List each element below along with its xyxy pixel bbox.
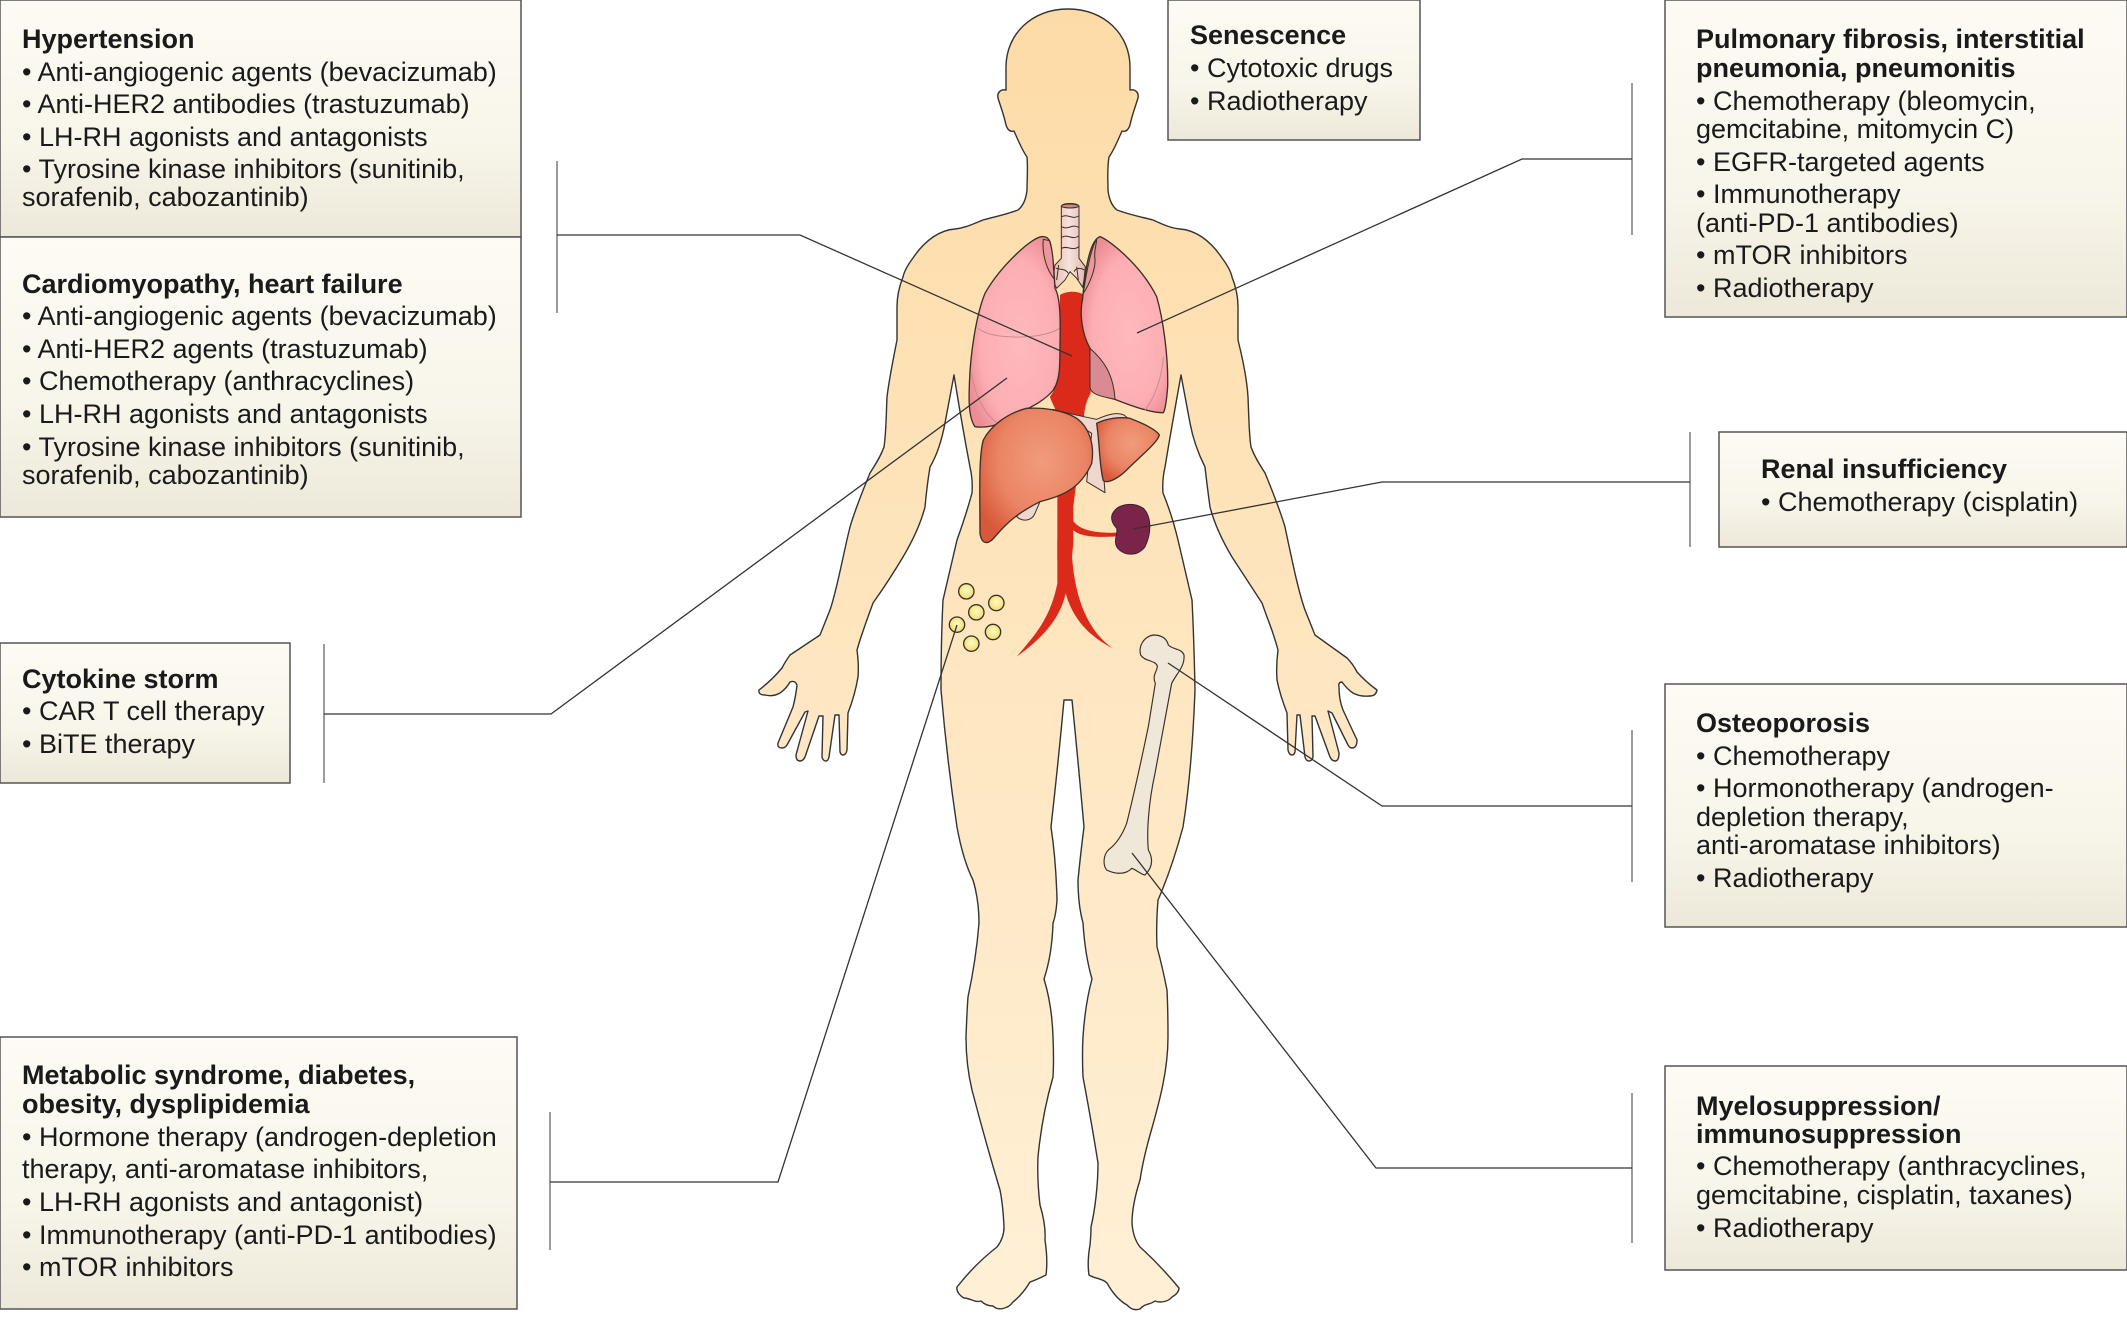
- panel: metabolic syndrome: [0, 1037, 517, 1309]
- trachea and bronchi: [1053, 203, 1085, 288]
- list: cardiomyopathy agents: • Tyrosine kinase inhibitors (sunitinib,: [22, 432, 465, 462]
- list: pulmonary agents: • Chemotherapy (bleomycin,: [1696, 86, 2036, 116]
- list: osteoporosis agents: [1696, 741, 2054, 893]
- panel: pulmonary fibrosis: [1665, 0, 2127, 317]
- femur bone: [1104, 635, 1184, 875]
- list: hypertension agents: [22, 57, 497, 212]
- list: cytokine agents: • BiTE therapy: [22, 729, 196, 759]
- kidney: [1112, 504, 1150, 554]
- list: pulmonary agents: • mTOR inhibitors: [1696, 240, 1908, 270]
- list: myelosuppression agents: [1696, 1151, 2087, 1243]
- list: myelosuppression agents: • Radiotherapy: [1696, 1213, 1874, 1243]
- list: pulmonary agents: • Immunotherapy: [1696, 179, 1901, 209]
- heading: metabolic syndrome: Metabolic syndrome, diabetes,: [22, 1060, 415, 1090]
- list: cardiomyopathy agents: • LH-RH agonists and antagonists: [22, 399, 428, 429]
- list: pulmonary agents: • EGFR-targeted agents: [1696, 147, 1985, 177]
- list: hypertension agents: • Anti-HER2 antibodies (trastuzumab): [22, 89, 470, 119]
- panel: myelosuppression: immunosuppression: [1696, 1119, 1962, 1149]
- human body silhouette: [759, 9, 1377, 1310]
- connector: metabolic syndrome to fat cells: [550, 625, 957, 1250]
- list: osteoporosis agents: • Chemotherapy: [1696, 741, 1891, 771]
- adipose cells: [949, 584, 1004, 651]
- connector: cytokine storm to lung: [324, 378, 1007, 783]
- heading: cytokine storm: Cytokine storm: [22, 664, 219, 694]
- heading: pulmonary fibrosis: Pulmonary fibrosis, interstitial: [1696, 24, 2085, 54]
- list: metabolic agents: • mTOR inhibitors: [22, 1252, 234, 1282]
- list: pulmonary agents: gemcitabine, mitomycin C): [1696, 114, 2014, 144]
- list: hypertension agents: • Tyrosine kinase inhibitors (sunitinib,: [22, 154, 465, 184]
- list: metabolic agents: [22, 1122, 497, 1282]
- aorta and renal artery: [1017, 292, 1117, 657]
- list: osteoporosis agents: • Hormonotherapy (androgen-: [1696, 773, 2054, 803]
- panel: senescence: [1168, 0, 1420, 140]
- list: cytokine agents: • CAR T cell therapy: [22, 696, 265, 726]
- heading: cardiomyopathy: Cardiomyopathy, heart failure: [22, 269, 403, 299]
- list: cardiomyopathy agents: • Anti-HER2 agents (trastuzumab): [22, 334, 428, 364]
- list: senescence agents: [1190, 53, 1393, 116]
- list: hypertension agents: • LH-RH agonists and antagonists: [22, 122, 428, 152]
- heading: myelosuppression: Myelosuppression/: [1696, 1091, 1941, 1121]
- list: pulmonary agents: • Radiotherapy: [1696, 273, 1874, 303]
- connector: cardiovascular boxes to aorta: [557, 161, 1072, 356]
- panel: cytokine storm: [0, 643, 290, 783]
- connector: myelosuppression to bone marrow: [1132, 853, 1632, 1243]
- heading: hypertension: Hypertension: [22, 24, 195, 54]
- list: metabolic agents: • LH-RH agonists and antagonist): [22, 1187, 423, 1217]
- heading: senescence: Senescence: [1190, 20, 1346, 50]
- connector: pulmonary to lung: [1137, 83, 1632, 333]
- list: hypertension agents: • Anti-angiogenic agents (bevacizumab): [22, 57, 497, 87]
- panel: myelosuppression: [1665, 1066, 2127, 1270]
- list: senescence agents: • Cytotoxic drugs: [1190, 53, 1393, 83]
- list: senescence agents: • Radiotherapy: [1190, 86, 1368, 116]
- list: cardiomyopathy agents: • Anti-angiogenic agents (bevacizumab): [22, 301, 497, 331]
- lungs: [969, 237, 1168, 427]
- list: osteoporosis agents: depletion therapy,: [1696, 802, 1909, 832]
- list: cardiomyopathy agents: sorafenib, cabozantinib): [22, 460, 309, 490]
- connector: osteoporosis to femur: [1168, 663, 1632, 882]
- panel: metabolic syndrome: obesity, dysplipidemia: [22, 1089, 311, 1119]
- liver: [980, 408, 1159, 543]
- connector: renal to kidney: [1133, 432, 1690, 547]
- list: metabolic agents: therapy, anti-aromatase inhibitors,: [22, 1154, 428, 1184]
- list: myelosuppression agents: • Chemotherapy (anthracyclines,: [1696, 1151, 2087, 1181]
- list: pulmonary agents: (anti-PD-1 antibodies): [1696, 208, 1959, 238]
- panel: pulmonary fibrosis: pneumonia, pneumonitis: [1696, 53, 2016, 83]
- panel: osteoporosis: [1665, 684, 2127, 927]
- heading: renal insufficiency: Renal insufficiency: [1761, 454, 2007, 484]
- list: myelosuppression agents: gemcitabine, cisplatin, taxanes): [1696, 1180, 2073, 1210]
- list: osteoporosis agents: • Radiotherapy: [1696, 863, 1874, 893]
- list: cytokine agents: [22, 696, 265, 759]
- list: renal agents: • Chemotherapy (cisplatin): [1761, 487, 2078, 517]
- list: metabolic agents: • Hormone therapy (androgen-depletion: [22, 1122, 497, 1152]
- list: cardiomyopathy agents: [22, 301, 497, 490]
- list: metabolic agents: • Immunotherapy (anti-PD-1 antibodies): [22, 1220, 497, 1250]
- panel: renal insufficiency: [1719, 432, 2127, 547]
- panel: hypertension: [0, 0, 521, 237]
- list: hypertension agents: sorafenib, cabozantinib): [22, 182, 309, 212]
- list: osteoporosis agents: anti-aromatase inhibitors): [1696, 830, 2001, 860]
- list: pulmonary agents: [1696, 86, 2036, 303]
- panel: cardiomyopathy: [0, 237, 521, 517]
- list: cardiomyopathy agents: • Chemotherapy (anthracyclines): [22, 366, 414, 396]
- heading: osteoporosis: Osteoporosis: [1696, 708, 1870, 738]
